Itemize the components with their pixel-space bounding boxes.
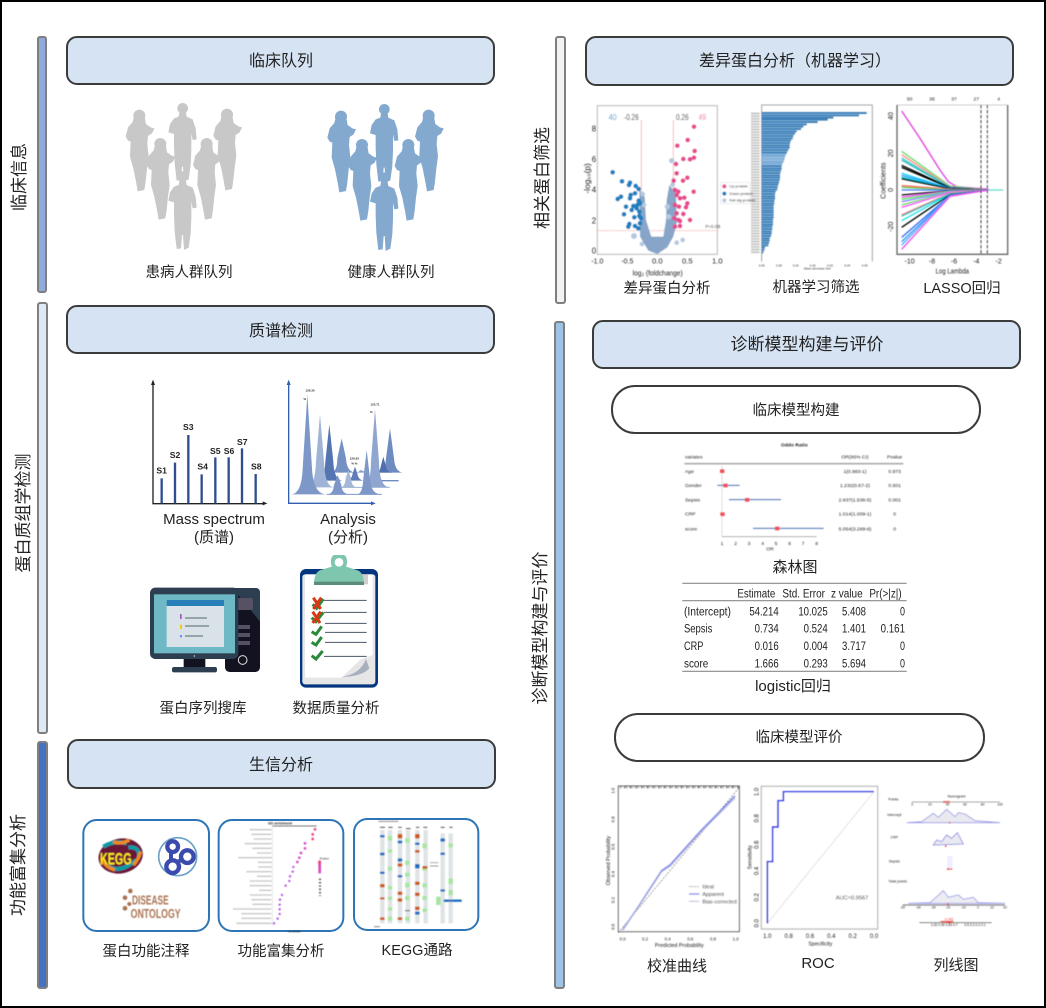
chart: calibration curve — [606, 786, 739, 949]
chart: mass spectrum bars: S3 — [183, 422, 194, 432]
chart: machine learning importance bars: 0.05 — [776, 264, 782, 268]
chart: ROC curve: Sensitivity — [748, 845, 754, 869]
icon: Disease Ontology logo: DISEASE — [132, 892, 169, 907]
chart: nomogram: Intercept — [887, 813, 901, 817]
chart: ROC curve: 0.8 — [754, 814, 760, 822]
chart: nomogram: 10 — [990, 905, 994, 909]
table: logistic regression: 0.524 — [804, 622, 828, 636]
icon: GO logo — [159, 838, 197, 876]
chart: LASSO coefficient paths: Coefficients — [881, 162, 888, 199]
chart: forest plot: 2 — [734, 541, 737, 547]
heading: diagnostic model: 诊断模型构建与评价 — [730, 335, 884, 354]
caption: functional enrichment analysis: 功能富集分析 — [238, 942, 324, 960]
table: logistic regression: 5.408 — [842, 604, 866, 618]
table: logistic regression: Estimate — [737, 587, 776, 601]
chart: forest plot: Pvalue — [887, 455, 903, 461]
table: logistic regression: Pr(>|z|) — [869, 587, 902, 601]
icon: Disease Ontology logo: ONTOLOGY — [131, 906, 181, 921]
chart: mass spectrum bars: S1 — [156, 465, 167, 475]
chart: analysis peaks: 126.30 — [305, 389, 315, 393]
chart: nomogram: Nomogram — [948, 794, 966, 798]
side bar: related protein screening: 相关蛋白筛选 — [533, 127, 552, 229]
chart: analysis peaks: 125.71 — [370, 402, 380, 406]
chart: LASSO coefficient paths — [881, 97, 1008, 275]
chart: LASSO coefficient paths: 36 — [929, 97, 935, 103]
chart: nomogram: -20 — [946, 905, 951, 909]
chart: volcano plot: -0.26 — [624, 113, 639, 122]
table: logistic regression: Std. Error — [782, 587, 825, 601]
chart: forest plot: 1(0.983-1) — [843, 469, 867, 475]
caption: KEGG pathway: KEGG通路 — [382, 942, 453, 959]
chart: calibration curve: 0.6 — [611, 843, 616, 850]
chart: calibration curve: 0.8 — [710, 937, 717, 942]
chart: mass spectrum bars — [151, 380, 267, 505]
chart: mass spectrum bars: S4 — [197, 461, 208, 471]
chart: calibration curve: 0.4 — [611, 870, 616, 877]
chart: nomogram: 100 — [997, 803, 1003, 807]
chart: forest plot: 5.054(3.289-8) — [839, 526, 872, 532]
chart: analysis peaks: % % — [351, 461, 358, 465]
chart: forest plot: 6 — [788, 541, 791, 547]
chart: nomogram: Total points — [888, 880, 907, 884]
side bar: related protein screening — [533, 37, 565, 303]
chart: LASSO coefficient paths: 27 — [974, 97, 979, 103]
table: logistic regression: (Intercept) — [684, 604, 731, 618]
chart: LASSO coefficient paths: 4 — [997, 97, 1000, 103]
table: logistic regression: 54.214 — [749, 604, 779, 618]
chart: mass spectrum bars: S6 — [224, 446, 234, 456]
heading: diagnostic model — [593, 321, 1020, 368]
pill: clinical model construction — [612, 386, 980, 433]
table: logistic regression: 3.717 — [842, 639, 866, 653]
icon: Disease Ontology logo — [123, 889, 181, 921]
chart: ROC curve: AUC=0.9567 — [836, 895, 868, 901]
table: logistic regression: 10.025 — [798, 604, 828, 618]
chart: nomogram: -10 — [961, 905, 966, 909]
chart: forest plot: 7 — [802, 541, 805, 547]
side bar: clinical information: 临床信息 — [10, 143, 29, 211]
chart: nomogram: 80 — [981, 803, 985, 807]
chart: volcano plot: Up protein — [729, 184, 748, 189]
table: logistic regression: 0 — [900, 604, 905, 618]
chart: forest plot: variates — [685, 455, 703, 461]
chart: volcano plot: 1.0 — [712, 257, 723, 266]
chart: calibration curve: 0.6 — [687, 937, 694, 942]
chart: forest plot: OR — [766, 546, 774, 552]
chart: forest plot: 0.001 — [888, 497, 901, 503]
chart: LASSO coefficient paths: 0 — [888, 188, 895, 192]
chart: LASSO coefficient paths: -8 — [929, 259, 935, 266]
chart: LASSO coefficient paths: Log Lambda — [936, 268, 969, 275]
chart: LASSO coefficient paths: 40 — [888, 112, 895, 120]
side bar: clinical information — [10, 37, 46, 292]
chart: calibration curve: Predicted Probability — [655, 943, 704, 949]
chart: calibration curve: 0.4 — [665, 937, 671, 942]
heading: bioinformatics: 生信分析 — [249, 756, 313, 774]
chart: analysis peaks: % — [303, 397, 306, 401]
caption: data quality analysis: 数据质量分析 — [292, 700, 380, 717]
chart: volcano plot: Not sig-protein — [729, 198, 755, 203]
chart: volcano plot: 0.5 — [682, 257, 693, 266]
chart: calibration curve: Observed Probability — [606, 836, 612, 885]
chart: calibration curve: 0.2 — [642, 937, 649, 942]
pill: clinical model evaluation: 临床模型评价 — [756, 729, 843, 746]
heading: differential protein analysis: 差异蛋白分析（机器学习） — [699, 52, 891, 70]
chart: calibration curve: 1.0 — [733, 937, 739, 942]
chart: machine learning importance bars: 0.00 — [759, 264, 765, 268]
chart: ROC curve: 0.4 — [754, 866, 760, 875]
caption: machine learning screening: 机器学习筛选 — [772, 279, 860, 296]
chart: nomogram: 0 — [977, 905, 979, 909]
icon: healthy cohort runners — [327, 104, 444, 251]
chart: nomogram: -30 — [931, 905, 936, 909]
table: logistic regression: 5.694 — [842, 657, 866, 671]
chart: LASSO coefficient paths: -6 — [951, 259, 957, 266]
table: logistic regression: 0.004 — [804, 639, 828, 653]
side bar: proteomics detection: 蛋白质组学检测 — [14, 454, 33, 572]
chart: calibration curve: 1.0 — [611, 787, 616, 794]
heading: mass spectrometry: 质谱检测 — [249, 322, 313, 340]
chart: forest plot: 1.232(0.67-2) — [840, 483, 870, 489]
chart: mass spectrum bars: S2 — [170, 450, 180, 460]
chart: ROC curve: 0.2 — [754, 893, 760, 901]
chart: volcano plot: 0.0 — [652, 257, 663, 266]
chart: calibration curve: 0.0 — [620, 937, 626, 942]
caption: logistic regression: logistic回归 — [755, 678, 831, 695]
chart: calibration curve: Ideal — [702, 885, 714, 891]
caption: mass spectrum — [163, 511, 265, 546]
chart: nomogram: Points — [888, 798, 899, 802]
chart: forest plot: 8 — [815, 541, 818, 547]
chart: volcano plot: log₂ (foldchange) — [633, 268, 683, 277]
table: logistic regression: CRP — [684, 639, 703, 653]
chart: LASSO coefficient paths: -2 — [996, 259, 1002, 266]
panel: enrichment dot plot: Pvalue — [320, 856, 329, 860]
heading: differential protein analysis — [586, 37, 1013, 85]
panel: enrichment dot plot: GO enrichment — [268, 822, 293, 826]
chart: machine learning importance bars: Mean decrease Gini — [804, 266, 831, 270]
chart: ROC curve: 0.0 — [754, 919, 760, 927]
chart: volcano plot: 0.26 — [676, 113, 689, 122]
chart: calibration curve: 0.2 — [611, 896, 616, 903]
chart: ROC curve: 0.6 — [754, 840, 760, 849]
side bar: functional enrichment: 功能富集分析 — [9, 814, 28, 916]
chart: LASSO coefficient paths: -20 — [888, 222, 895, 232]
chart: ROC curve: 1.0 — [754, 787, 760, 796]
chart: forest plot: 1.014(1.009-1) — [839, 512, 872, 518]
table: logistic regression: 0.734 — [755, 622, 779, 636]
caption: analysis — [320, 511, 376, 546]
chart: forest plot: Gender — [685, 483, 702, 489]
chart: ROC curve: Specificity — [808, 942, 833, 948]
chart: forest plot: 5 — [775, 541, 778, 547]
caption: calibration curve: 校准曲线 — [647, 958, 707, 975]
chart: volcano plot: 2 — [592, 216, 597, 225]
chart: nomogram: 60 — [963, 803, 967, 807]
caption: nomogram: 列线图 — [933, 957, 979, 974]
icon: patient cohort runners — [126, 103, 242, 250]
chart: nomogram: 0.742 — [945, 917, 953, 921]
chart: volcano plot: P=0.05 — [705, 224, 721, 229]
caption: ROC: ROC — [801, 955, 835, 972]
chart: machine learning importance bars: 0.25 — [844, 264, 851, 268]
chart: mass spectrum bars: S8 — [251, 462, 262, 472]
chart: machine learning importance bars: 0.10 — [793, 264, 799, 268]
caption: analysis: Analysis — [320, 511, 376, 528]
icon: KEGG logo: KEGG — [100, 850, 132, 869]
chart: LASSO coefficient paths: 37 — [951, 97, 957, 103]
heading: clinical cohort: 临床队列 — [249, 52, 313, 70]
chart: machine learning importance bars: 0.15 — [810, 264, 816, 268]
chart: nomogram: -50 — [900, 905, 905, 909]
table: logistic regression: 0.293 — [804, 657, 828, 671]
chart: nomogram: 0 — [911, 803, 913, 807]
chart: machine learning importance bars: 0.30 — [862, 264, 868, 268]
chart: volcano plot: 49 — [699, 113, 706, 122]
panel: enrichment dot plot: GeneRatio — [288, 930, 301, 934]
chart: volcano plot: Down protein — [729, 191, 753, 196]
chart: forest plot: Oddo Ratio — [781, 443, 808, 449]
table: logistic regression: Sepsis — [684, 622, 712, 636]
caption: protein sequence database search: 蛋白序列搜库 — [160, 700, 246, 717]
chart: forest plot — [684, 443, 903, 552]
pill: clinical model construction: 临床模型构建 — [752, 402, 840, 419]
chart: volcano plot: 0 — [592, 247, 597, 256]
heading: clinical cohort — [67, 37, 494, 84]
chart: volcano plot — [582, 106, 755, 277]
chart: calibration curve: 0.8 — [611, 816, 616, 822]
panel: enrichment dot plot — [219, 820, 343, 934]
chart: forest plot: 0 — [893, 512, 896, 518]
chart: LASSO coefficient paths: 50 — [907, 97, 913, 103]
side bar: diagnostic model: 诊断模型构建与评价 — [531, 552, 550, 704]
caption: mass spectrum: (质谱) — [194, 529, 234, 546]
chart: nomogram: CRP — [890, 836, 899, 840]
table: logistic regression: 1.666 — [755, 657, 779, 671]
chart: calibration curve: Bias-corrected — [702, 899, 737, 905]
chart: forest plot: 3 — [748, 541, 751, 547]
chart: volcano plot: 6 — [592, 155, 597, 164]
side bar: functional enrichment — [9, 742, 47, 988]
table: logistic regression: 0.016 — [755, 639, 779, 653]
chart: ROC curve — [748, 786, 879, 948]
chart: forest plot: 0.501 — [888, 483, 901, 489]
icon: computer for database search — [150, 588, 260, 672]
chart: nomogram — [887, 794, 1007, 927]
chart: forest plot: 0.973 — [888, 469, 901, 475]
chart: ROC curve: 0.6 — [806, 934, 815, 940]
chart: machine learning importance bars: 0.20 — [827, 264, 833, 268]
table: logistic regression: 0.161 — [881, 622, 905, 636]
chart: forest plot: score — [685, 526, 697, 532]
chart: forest plot: 1 — [721, 541, 724, 547]
table: logistic regression: 0 — [900, 657, 905, 671]
chart: nomogram: 20 — [1003, 905, 1007, 909]
chart: volcano plot: -0.5 — [621, 257, 633, 266]
caption: differential protein analysis: 差异蛋白分析 — [624, 280, 710, 297]
side bar: proteomics detection — [14, 303, 47, 733]
chart: nomogram: -40 — [916, 905, 921, 909]
caption: LASSO regression: LASSO回归 — [923, 280, 1001, 297]
chart: nomogram: 0.5 0.3 0.2 0.1 — [964, 923, 986, 927]
chart: ROC curve: 0.0 — [870, 934, 879, 940]
chart: calibration curve: 0.0 — [611, 923, 616, 930]
chart: analysis peaks: % — [370, 410, 373, 414]
heading: bioinformatics — [68, 740, 495, 788]
chart: LASSO coefficient paths: -4 — [973, 259, 980, 266]
chart: ROC curve: 0.4 — [827, 934, 836, 940]
chart: calibration curve: Apparent — [702, 892, 724, 898]
heading: mass spectrometry — [67, 306, 494, 353]
chart: volcano plot: 40 — [609, 113, 617, 122]
caption: healthy cohort: 健康人群队列 — [348, 264, 434, 281]
chart: forest plot: Age — [685, 469, 694, 475]
chart: ROC curve: 0.2 — [849, 934, 857, 940]
chart: nomogram: Sepsis — [889, 859, 900, 863]
caption: protein function annotation: 蛋白功能注释 — [102, 943, 190, 960]
panel: protein function annotation — [83, 820, 209, 931]
caption: patient cohort: 患病人群队列 — [146, 264, 232, 281]
table: logistic regression: 1.401 — [842, 622, 866, 636]
chart: analysis peaks — [287, 380, 404, 505]
caption: mass spectrum: Mass spectrum — [163, 511, 265, 528]
panel: KEGG pathway — [354, 819, 478, 930]
side bar: diagnostic model — [531, 322, 564, 988]
chart: ROC curve: 1.0 — [763, 934, 772, 940]
pill: clinical model evaluation — [615, 714, 984, 761]
chart: forest plot: 4 — [761, 541, 764, 547]
chart: analysis peaks: 126.30 — [350, 456, 359, 460]
chart: mass spectrum bars: S5 — [210, 446, 221, 456]
table: logistic regression — [682, 583, 907, 671]
chart: forest plot: Sepsis — [685, 497, 700, 503]
chart: volcano plot: -log₁₀(p) — [582, 163, 592, 194]
chart: LASSO coefficient paths: 20 — [888, 149, 895, 157]
chart: nomogram: 40 — [946, 803, 950, 807]
chart: nomogram: 1.00 0.90 0.80 0.7 — [931, 923, 958, 927]
chart: mass spectrum bars: S7 — [237, 437, 248, 447]
chart: forest plot: CRP — [685, 512, 696, 518]
caption: analysis: (分析) — [328, 529, 368, 546]
table: logistic regression: 0 — [900, 639, 905, 653]
chart: forest plot: 2.837(1.536-5) — [839, 497, 872, 503]
chart: LASSO coefficient paths: -10 — [905, 259, 915, 266]
caption: forest plot: 森林图 — [772, 559, 818, 576]
icon: clipboard for data quality — [300, 555, 378, 688]
chart: forest plot: 0 — [893, 526, 896, 532]
chart: volcano plot: 4 — [592, 186, 597, 195]
chart: volcano plot: 8 — [592, 124, 597, 133]
chart: nomogram: 20 — [928, 803, 932, 807]
chart: machine learning importance bars — [755, 105, 872, 270]
chart: forest plot: OR(95% CI) — [841, 455, 869, 461]
chart: volcano plot: -1.0 — [591, 257, 603, 266]
table: logistic regression: z value — [831, 587, 863, 601]
table: logistic regression: score — [684, 657, 709, 671]
chart: ROC curve: 0.8 — [785, 934, 793, 940]
